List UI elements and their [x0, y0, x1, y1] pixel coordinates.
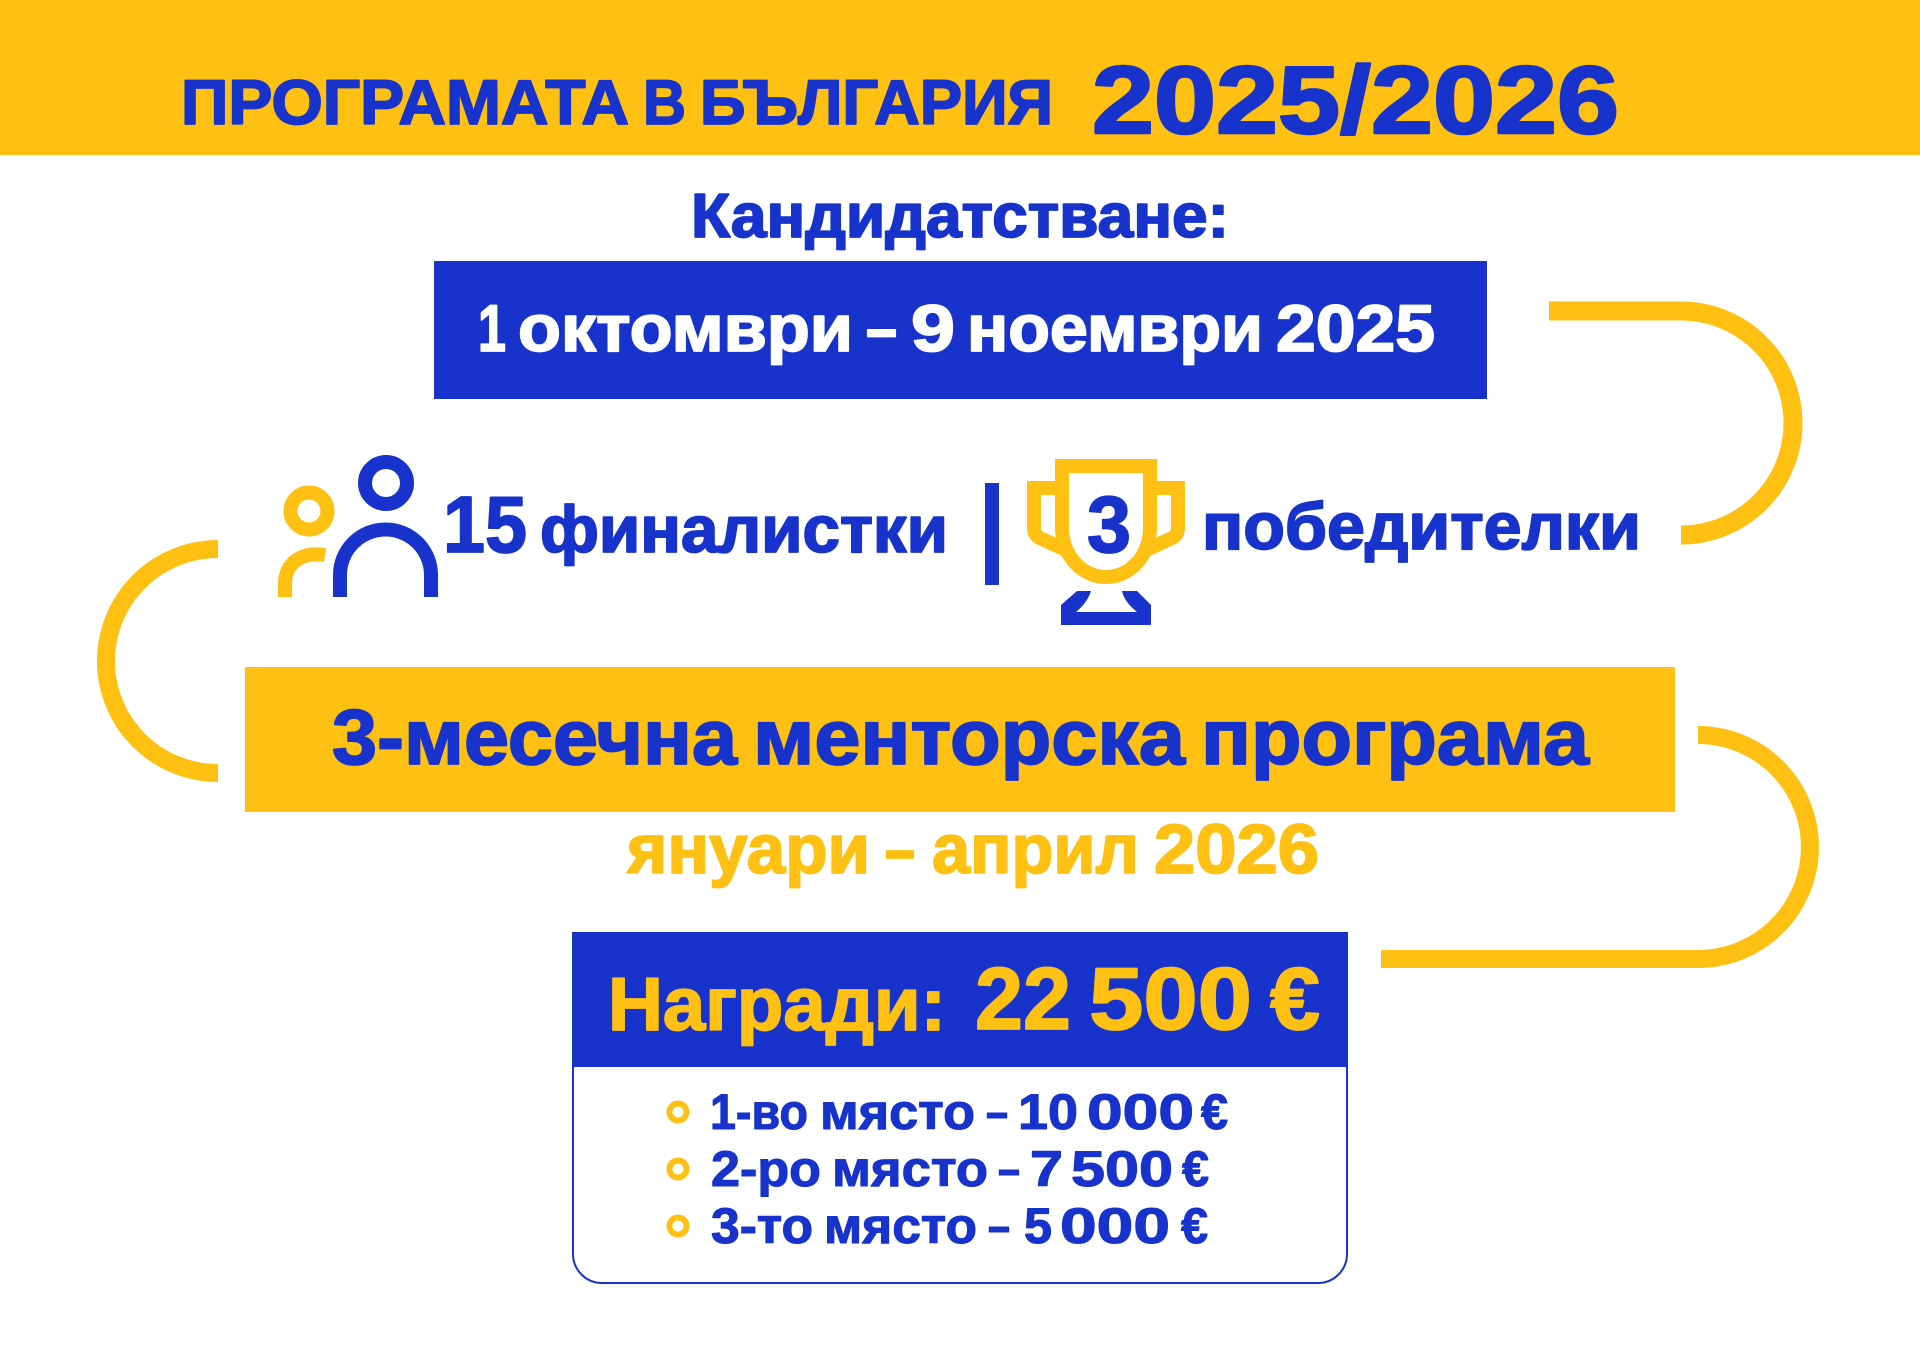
prize: third place: –	[988, 1198, 1010, 1254]
winners label: победителки	[1202, 489, 1641, 563]
finalists count: 15	[443, 480, 527, 569]
mentoring programme band: менторска	[753, 693, 1186, 781]
application dates box	[434, 261, 1487, 399]
title: БЪЛГАРИЯ	[700, 68, 1053, 138]
programme dates: –	[885, 810, 915, 888]
prize: second place: 7	[1030, 1141, 1063, 1197]
icon: people	[285, 462, 431, 597]
prize: third place: €	[1181, 1198, 1208, 1254]
mentoring programme band: програма	[1201, 693, 1590, 781]
application dates box: ноември	[967, 291, 1263, 365]
prize: third place	[670, 1198, 1208, 1254]
prize: third place: място	[824, 1198, 977, 1254]
prize: first place: –	[986, 1084, 1008, 1140]
prize: second place: 500	[1071, 1141, 1173, 1197]
programme dates: януари	[626, 810, 870, 888]
prize: first place: €	[1201, 1084, 1228, 1140]
prize: first place: 1-во	[710, 1084, 808, 1140]
title	[181, 68, 1053, 138]
prizes header: Награди:	[608, 962, 946, 1046]
panel: prizes	[572, 932, 1348, 1283]
application heading: Кандидатстване:	[691, 182, 1229, 251]
arrow: lower right connector	[1381, 735, 1810, 959]
prize: third place: 000	[1060, 1198, 1170, 1254]
mentoring programme band: 3-месечна	[332, 693, 738, 781]
prizes header: €	[1270, 949, 1320, 1048]
prize: third place: 3-то	[711, 1198, 813, 1254]
application dates box: октомври	[518, 291, 853, 365]
prize: second place	[670, 1141, 1209, 1197]
prize: second place: 2-ро	[711, 1141, 821, 1197]
prize: second place: място	[832, 1141, 988, 1197]
prizes header: 500	[1089, 949, 1252, 1048]
icon: trophy: 3	[1087, 480, 1131, 569]
prize: first place: място	[820, 1084, 975, 1140]
application dates box: 1	[478, 291, 506, 365]
divider	[985, 483, 999, 585]
mentoring programme band	[245, 667, 1675, 812]
programme dates: 2026	[1154, 810, 1319, 888]
application dates box: 2025	[1276, 291, 1435, 365]
prize: second place: –	[998, 1141, 1020, 1197]
year heading: 2025/2026	[1092, 47, 1619, 154]
arrow: left connector	[106, 549, 218, 773]
title: В	[643, 68, 686, 138]
finalists label: финалистки	[540, 492, 948, 566]
programme dates: април	[932, 810, 1139, 888]
prizes header	[572, 932, 1348, 1067]
arrow: top right connector	[1549, 311, 1793, 535]
prize: first place: 000	[1087, 1084, 1194, 1140]
header banner	[0, 0, 1920, 155]
prize: third place: 5	[1024, 1198, 1052, 1254]
prize: first place: 10	[1018, 1084, 1078, 1140]
application dates box: 9	[911, 291, 955, 365]
title: ПРОГРАМАТА	[181, 68, 629, 138]
prizes header: 22	[975, 949, 1071, 1048]
icon: trophy	[1034, 466, 1178, 625]
prize: first place	[670, 1084, 1228, 1140]
programme dates	[626, 810, 1319, 888]
prize: second place: €	[1182, 1141, 1209, 1197]
application dates box: –	[866, 291, 897, 365]
